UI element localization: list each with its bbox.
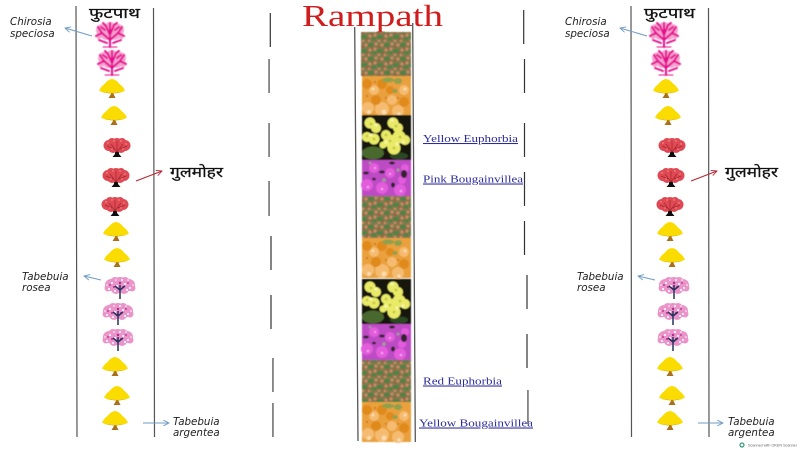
tree: pink 1 — [650, 22, 678, 47]
label: Chirosia speciosa: speciosa — [10, 28, 55, 40]
tree: yellow 6 — [104, 386, 130, 405]
tree: red 2 — [102, 168, 130, 187]
tree: yellow 4 — [104, 248, 130, 267]
label: Tabebuia rosea: rosea — [577, 282, 606, 294]
label: Tabebuia argentea: argentea — [728, 427, 775, 439]
road lane dashes: left — [269, 13, 273, 437]
footpath edge lines — [631, 6, 709, 437]
tree: yellow 3 — [103, 222, 129, 241]
tree: red 1 — [658, 138, 686, 157]
footpath edge lines — [76, 6, 154, 437]
tree: yellow 3 — [657, 222, 683, 241]
panel: median flower beds — [361, 32, 411, 443]
flower bed: pink bougainvillea 2 — [361, 324, 411, 360]
label: Tabebuia rosea: Tabebuia — [577, 271, 624, 283]
arrow: Gulmohar — [691, 171, 717, 181]
arrow: Chirosia — [65, 28, 92, 36]
label: Pink Bougainvillea: Pink Bougainvillea — [423, 174, 523, 186]
tree: yellow 1 — [653, 79, 679, 98]
label: Tabebuia argentea: argentea — [173, 427, 220, 439]
label: Chirosia speciosa: speciosa — [565, 28, 610, 40]
tree: pink 2 — [652, 50, 680, 75]
tree: rosea 3 — [658, 329, 688, 351]
tree: yellow 5 — [657, 357, 683, 376]
median edge lines — [355, 23, 415, 442]
tree: red 3 — [656, 197, 684, 216]
flower bed: red euphorbia 1 — [361, 32, 411, 76]
icon: scanner logo — [740, 443, 744, 447]
arrow: Tabebuia rosea — [84, 276, 101, 280]
panel: left footpath — [10, 6, 224, 439]
label: Tabebuia rosea: Tabebuia — [22, 271, 69, 283]
tree: red 3 — [102, 197, 128, 216]
flower bed: red euphorbia 2 — [362, 196, 411, 238]
label: Yellow Euphorbia: Yellow Euphorbia — [423, 134, 518, 145]
tree: rosea 2 — [658, 303, 688, 325]
tree: pink 1 — [96, 22, 124, 47]
tree: yellow 1 — [99, 79, 125, 98]
tree: pink 2 — [98, 50, 126, 75]
tree: yellow 2 — [655, 106, 681, 125]
watermark — [740, 442, 798, 448]
arrow: Tabebuia argentea — [698, 422, 723, 424]
panel: right footpath — [565, 6, 779, 439]
tree: yellow 7 — [102, 411, 128, 430]
footpath heading: फुटपाथ — [644, 6, 696, 23]
label: Chirosia speciosa: Chirosia — [10, 16, 52, 28]
arrow: Tabebuia argentea — [143, 422, 169, 424]
flower bed: pink bougainvillea 1 — [361, 160, 411, 196]
tree: red 1 — [104, 138, 130, 157]
tree: rosea 2 — [102, 303, 134, 325]
watermark text: Scanned with OKEN Scanner — [748, 442, 798, 448]
tree: yellow 2 — [101, 106, 127, 125]
tree: rosea 3 — [102, 329, 134, 351]
road lane dashes: right — [524, 10, 528, 424]
flower bed: yellow bougainvillea 2 — [362, 238, 411, 279]
flower bed: yellow euphorbia 2 — [362, 279, 411, 324]
label: Tabebuia argentea: Tabebuia — [173, 416, 220, 428]
tree: yellow 4 — [659, 248, 685, 267]
tree: red 2 — [658, 168, 684, 187]
flower bed: yellow bougainvillea 3 — [362, 402, 411, 443]
label: Red Euphorbia: Red Euphorbia — [423, 376, 502, 388]
tree: yellow 7 — [657, 411, 683, 430]
label: Chirosia speciosa: Chirosia — [565, 16, 607, 28]
label: Gulmohar: गुलमोहर — [170, 164, 224, 182]
arrow: Gulmohar — [136, 171, 162, 181]
label: Tabebuia argentea: Tabebuia — [728, 416, 775, 428]
label: Tabebuia rosea: rosea — [22, 282, 51, 294]
tree: rosea 1 — [658, 277, 690, 299]
flower bed: yellow bougainvillea 1 — [362, 76, 411, 117]
flower bed: yellow euphorbia 1 — [362, 115, 411, 160]
arrow: Tabebuia rosea — [638, 276, 655, 280]
flower bed: red euphorbia 3 — [362, 360, 411, 402]
footpath heading: फुटपाथ — [89, 6, 141, 23]
tree: rosea 1 — [104, 277, 136, 299]
label: Gulmohar: गुलमोहर — [725, 164, 779, 182]
label: Yellow Bougainvillea: Yellow Bougainvillea — [419, 418, 533, 430]
arrow: Chirosia — [620, 28, 647, 36]
tree: yellow 6 — [659, 386, 685, 405]
tree: yellow 5 — [102, 357, 128, 376]
